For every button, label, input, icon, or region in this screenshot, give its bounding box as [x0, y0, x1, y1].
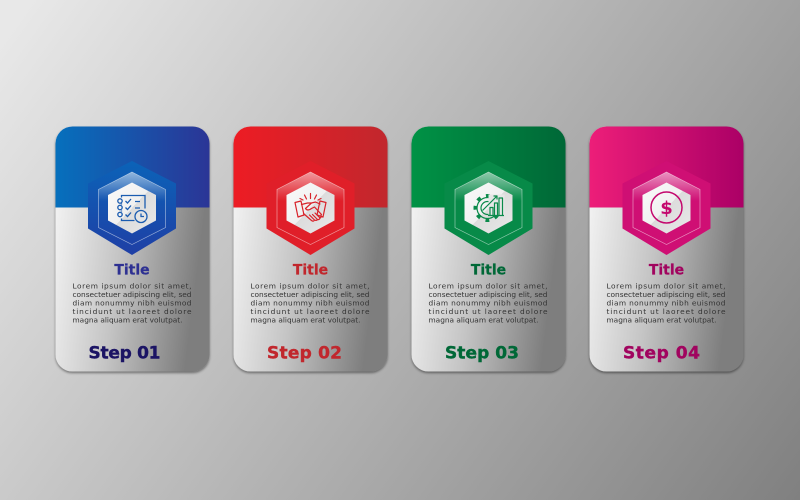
- step label: Step 04: [623, 344, 700, 364]
- body text: magna aliquam erat volutpat.: [606, 316, 716, 324]
- icon: dollar coin: [651, 192, 682, 223]
- body text: tincidunt ut laoreet dolore: [72, 307, 192, 316]
- step title: Title: [293, 262, 328, 278]
- card body: [590, 126, 744, 372]
- body text: consectetuer adipiscing elit, sed: [428, 290, 548, 299]
- body text: consectetuer adipiscing elit, sed: [72, 290, 192, 299]
- body text: Lorem ipsum dolor sit amet,: [72, 282, 192, 290]
- body text: [606, 282, 726, 324]
- card body: [412, 126, 566, 372]
- body text: diam nonummy nibh euismod: [606, 298, 726, 308]
- icon: gear with growth chart: [476, 194, 504, 220]
- body text: magna aliquam erat volutpat.: [72, 316, 182, 324]
- hexagon badge: [622, 161, 710, 255]
- body text: tincidunt ut laoreet dolore: [428, 307, 548, 316]
- body text: Lorem ipsum dolor sit amet,: [428, 282, 548, 290]
- body text: diam nonummy nibh euismod: [250, 298, 370, 308]
- header band: [56, 126, 210, 208]
- hexagon badge: [444, 161, 532, 255]
- hexagon badge: [266, 161, 354, 255]
- card body: [234, 126, 388, 372]
- header band: [412, 126, 566, 208]
- body text: magna aliquam erat volutpat.: [250, 316, 360, 324]
- step title: Title: [471, 262, 506, 278]
- body text: tincidunt ut laoreet dolore: [250, 307, 370, 316]
- body text: tincidunt ut laoreet dolore: [606, 307, 726, 316]
- body text: [72, 282, 192, 324]
- header band: [590, 126, 744, 208]
- step label: Step 02: [267, 344, 342, 364]
- step label: Step 01: [88, 344, 160, 364]
- body text: [250, 282, 370, 324]
- body text: consectetuer adipiscing elit, sed: [250, 290, 370, 299]
- body text: Lorem ipsum dolor sit amet,: [250, 282, 370, 290]
- body text: diam nonummy nibh euismod: [428, 298, 548, 308]
- header band: [234, 126, 388, 208]
- body text: Lorem ipsum dolor sit amet,: [606, 282, 726, 290]
- body text: [428, 282, 548, 324]
- panel: step 02: [234, 126, 388, 372]
- step title: Title: [649, 262, 684, 278]
- card body: [56, 126, 210, 372]
- step title: Title: [114, 262, 150, 278]
- body text: magna aliquam erat volutpat.: [428, 316, 538, 324]
- icon: checklist with clock: [118, 196, 147, 222]
- hexagon badge: [88, 161, 176, 255]
- icon: handshake: [295, 194, 326, 221]
- panel: step 01: [56, 126, 210, 372]
- step label: Step 03: [445, 344, 519, 364]
- panel: step 03: [412, 126, 566, 372]
- body text: consectetuer adipiscing elit, sed: [606, 290, 726, 299]
- body text: diam nonummy nibh euismod: [72, 298, 192, 308]
- panel: step 04: [590, 126, 744, 372]
- icon: dollar coin: $: [660, 198, 673, 219]
